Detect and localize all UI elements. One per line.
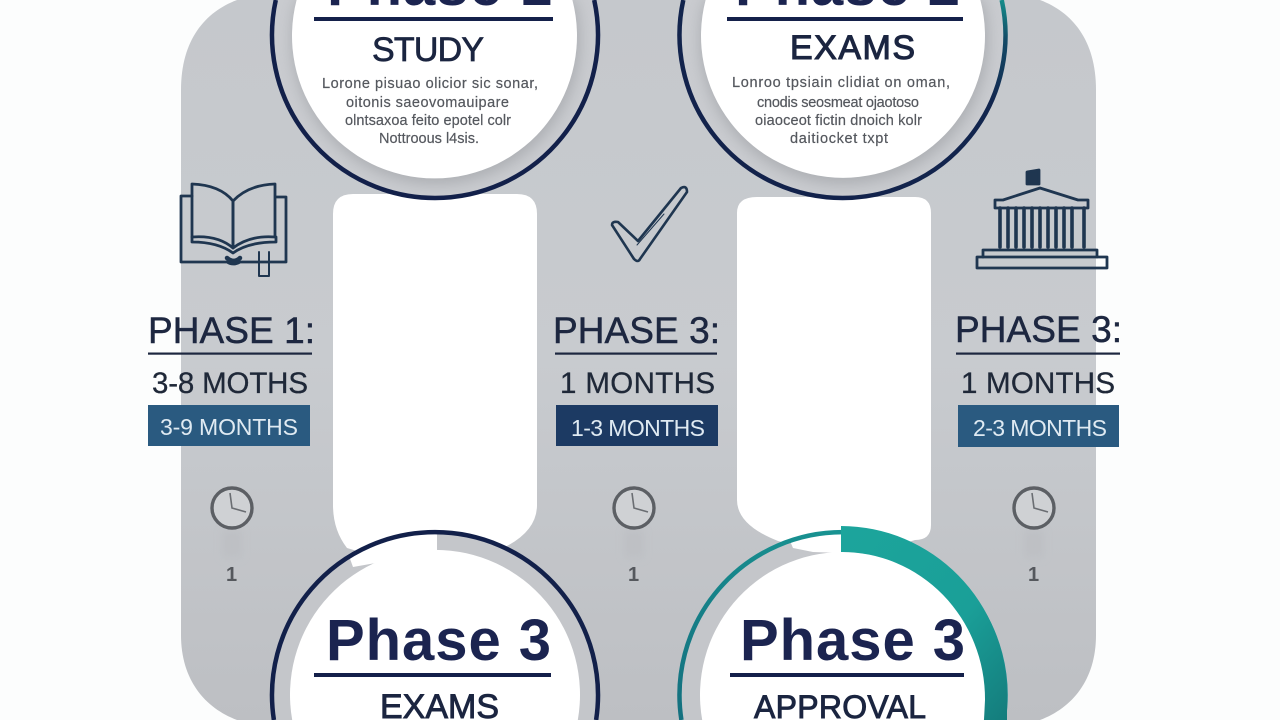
column: phase 3 duration right (955, 309, 1122, 447)
column: phase 3 duration middle: PHASE 3: (553, 310, 720, 351)
body text: study (322, 76, 538, 147)
icon: open book (181, 184, 286, 276)
body text: study: oitonis saeovomauipare (346, 95, 509, 111)
column: phase 3 duration middle (553, 310, 720, 446)
teal progress arc (841, 526, 1007, 720)
body text: study: Nottroous l4sis. (379, 131, 479, 147)
body text: exams (732, 75, 950, 147)
body text: exams: daitiocket txpt (790, 131, 888, 147)
heading: phase 3: Phase 3 (326, 608, 551, 673)
badge: 1-3 months (556, 405, 718, 446)
white slot: right (737, 197, 931, 560)
clock marker: middle: 1 (628, 564, 639, 586)
circle: phase 2 exams (680, 0, 1006, 198)
label: study: STUDY (372, 31, 484, 69)
badge: 3-9 months (148, 405, 310, 446)
badge: 1-3 months: 1-3 MONTHS (571, 415, 705, 441)
body text: exams: oiaoceot fictin dnoich kolr (755, 113, 922, 129)
circle: phase 1 study (272, 0, 598, 198)
clock marker: middle (614, 488, 654, 586)
icon: check mark (612, 187, 687, 261)
circle: phase 3 approval (680, 526, 1007, 720)
column: phase 3 duration middle: 1 MONTHS (560, 367, 715, 400)
badge: 2-3 months (958, 405, 1119, 447)
heading: phase 3: Phase 3 (740, 608, 965, 673)
clock marker: left (212, 488, 252, 586)
icon: institution building (977, 170, 1107, 268)
body text: exams: cnodis seosmeat ojaotoso (757, 95, 919, 111)
clock marker: right: 1 (1028, 564, 1039, 586)
grey backing panel (181, 0, 1096, 720)
white slot: left (333, 194, 537, 570)
column: phase 1 duration: 3-8 MOTHS (152, 367, 308, 400)
badge: 3-9 months: 3-9 MONTHS (160, 414, 298, 440)
badge: 2-3 months: 2-3 MONTHS (973, 415, 1107, 441)
column: phase 1 duration (148, 310, 315, 446)
column: phase 3 duration right: PHASE 3: (955, 309, 1122, 350)
body text: study: Lorone pisuao olicior sic sonar, (322, 76, 538, 92)
clock marker: right (1014, 488, 1054, 586)
body text: exams: Lonroo tpsiain clidiat on oman, (732, 75, 950, 91)
circle: phase 3 exams (272, 532, 598, 720)
body text: study: olntsaxoa feito epotel colr (345, 113, 511, 129)
label: exams: EXAMS (790, 29, 915, 67)
clock marker: left: 1 (226, 564, 237, 586)
column: phase 3 duration right: 1 MONTHS (961, 367, 1115, 400)
column: phase 1 duration: PHASE 1: (148, 310, 315, 351)
